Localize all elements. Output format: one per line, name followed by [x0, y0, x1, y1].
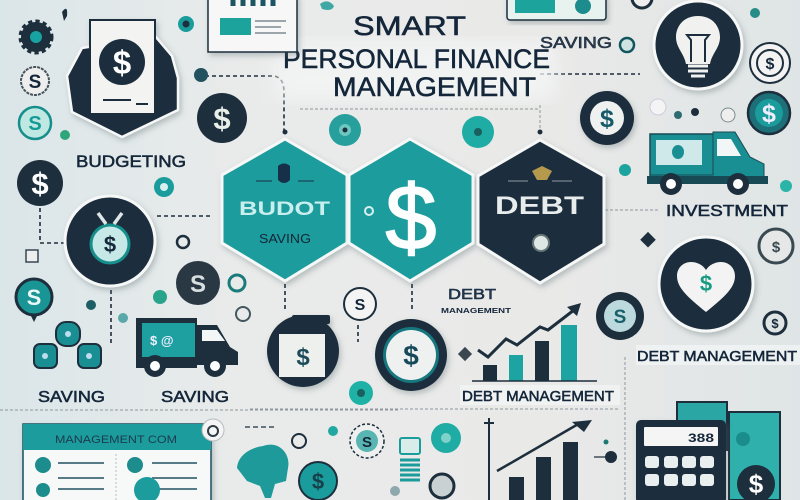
panel: website card	[23, 424, 211, 500]
icon: teal dollar coin right	[748, 92, 790, 134]
panel: debt hexagon: DEBT	[495, 192, 584, 220]
icon: calculator	[636, 420, 726, 500]
icon: ring coin right: $	[766, 56, 775, 73]
icon: gear	[21, 22, 51, 52]
panel: debt hexagon	[478, 140, 604, 283]
icon: gray coins right: $	[772, 239, 781, 256]
icon: teal coin and bars lower center	[400, 423, 461, 498]
icon: budgeting badge	[67, 20, 178, 137]
icon: budgeting badge: $	[113, 44, 131, 81]
icon: small coin top right	[320, 0, 652, 52]
icon: money jar: $	[296, 344, 310, 371]
icon: gray coins right: $	[771, 316, 779, 331]
icon: teal dollar coin right: $	[762, 100, 776, 128]
icon: banknotes: $	[749, 469, 764, 499]
icon: teal swirl coin	[596, 292, 644, 340]
icon: s coin with pin: S	[27, 285, 41, 310]
icon: teal s coin	[19, 107, 51, 139]
icon: small bottom center items	[245, 426, 400, 496]
panel: dollar hexagon: $	[385, 167, 437, 269]
heading: budgeting: BUDGETING	[76, 152, 186, 171]
icon: heart badge: $	[700, 271, 712, 296]
heading: debt management center: DEBT MANAGEMENT	[462, 388, 614, 405]
icon: card pin	[202, 419, 224, 441]
icon: banknotes	[677, 402, 780, 500]
icon: dollar ring large: $	[403, 340, 419, 371]
title: MANAGEMENT	[333, 72, 536, 102]
title: PERSONAL FINANCE	[283, 44, 550, 74]
icon: money bag badge	[65, 196, 155, 286]
icon: dark truck: $ @	[150, 333, 174, 348]
icon: outline s coin: S	[29, 72, 41, 93]
icon: dollar ring large	[375, 319, 447, 391]
heading: debt small: DEBT	[448, 286, 496, 303]
panel: budget hexagon: SAVING	[259, 231, 311, 246]
icon: dollar coin left: $	[31, 166, 49, 201]
icon: teal dollar coin bottom: $	[312, 469, 324, 494]
icon: small coins lower center: S	[355, 297, 366, 314]
icon: teal dollar coin bottom	[299, 462, 337, 500]
icon: ring coin right	[750, 43, 790, 83]
title: SMART	[353, 11, 466, 41]
label: saving top: SAVING	[540, 35, 612, 52]
heading: investment: INVESTMENT	[666, 203, 788, 220]
icon: teal s coin: S	[28, 113, 42, 135]
icon: connector dot	[594, 440, 617, 463]
icon: dollar ring coin	[580, 91, 634, 145]
panel: website card: MANAGEMENT COM	[55, 434, 177, 446]
icon: dark truck	[136, 318, 238, 377]
icon: money jar	[267, 315, 339, 387]
icon: dollar coin left	[17, 160, 63, 206]
panel: budget hexagon	[222, 139, 347, 281]
panel: dollar hexagon	[349, 139, 473, 281]
icon: teal swirl coin: S	[614, 307, 626, 328]
chart: debt bars with arrow	[458, 303, 597, 381]
panel: card top center	[507, 0, 606, 20]
icon: small decorative coins right	[619, 8, 792, 247]
icon: calculator: 388	[688, 431, 714, 445]
connector lines	[0, 74, 660, 500]
title	[275, 11, 555, 102]
icon: coin stack s: S	[190, 271, 206, 298]
chart: growth bars with arrow	[484, 418, 592, 500]
icon: small coins lower center	[86, 275, 376, 405]
heading: debt small	[441, 286, 512, 315]
icon: teal truck	[647, 132, 768, 195]
icon: heart badge	[659, 237, 753, 331]
icon: dashed s coin bottom	[350, 424, 384, 458]
icon: money bag badge: $	[104, 232, 116, 257]
icon: swirl coin: $	[213, 101, 231, 136]
icon: three coins	[34, 322, 101, 368]
icon: small teal coins	[26, 9, 494, 262]
labels: saving: SAVING	[161, 389, 229, 406]
heading: debt small: MANAGEMENT	[441, 306, 512, 315]
icon: globe	[237, 445, 288, 498]
panel: report card top	[208, 0, 297, 52]
icon: swirl coin	[197, 93, 247, 143]
icon: light bulb badge	[654, 1, 742, 89]
icon: outline s coin	[21, 67, 49, 95]
icon: dashed s coin bottom: S	[362, 434, 372, 451]
labels: saving	[38, 389, 229, 406]
labels: saving: SAVING	[38, 389, 105, 406]
panel: budget hexagon: BUDOT	[239, 199, 331, 220]
icon: coin stack s	[176, 261, 220, 305]
icon: s coin with pin	[16, 279, 52, 322]
icon: dollar ring coin: $	[600, 105, 614, 133]
heading: debt management right: DEBT MANAGEMENT	[637, 348, 797, 365]
icon: gray coins right	[759, 229, 793, 334]
